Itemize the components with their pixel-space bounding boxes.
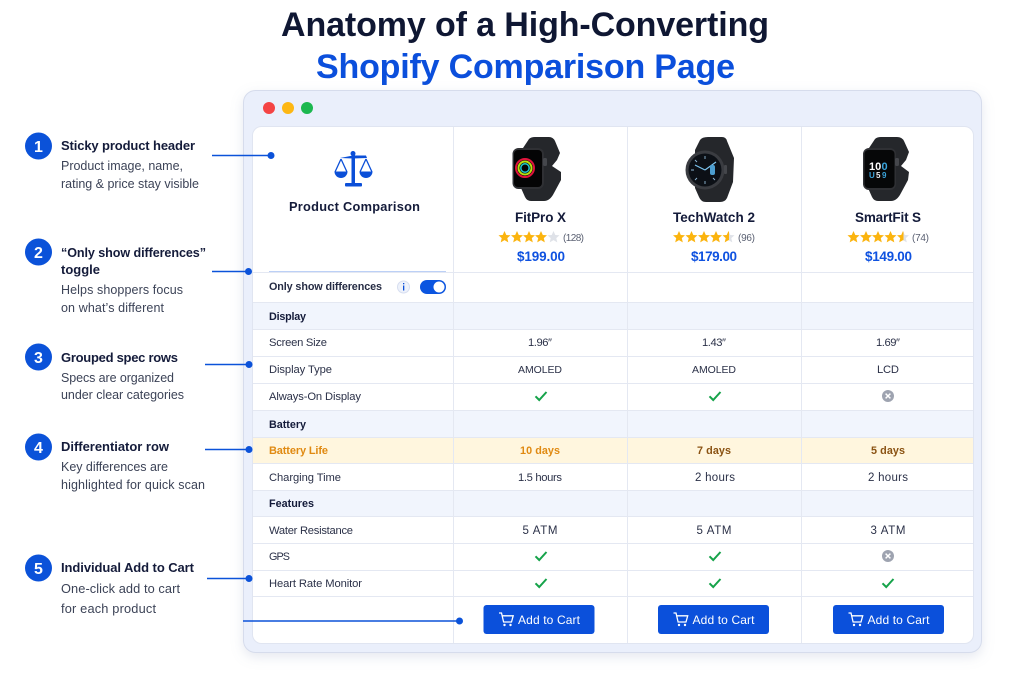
callout 1: sticky product header: Product image, name, (61, 159, 183, 173)
callout 2: only show differences toggle: toggle (61, 262, 100, 277)
callout 2: only show differences toggle: 2 (34, 245, 43, 262)
callout 2: only show differences toggle: “Only show differences” (61, 246, 206, 260)
callout 1: sticky product header: rating & price stay visible (61, 177, 199, 191)
icon: info (398, 281, 410, 293)
title (281, 6, 769, 86)
rating stars: (96) (738, 233, 755, 244)
icon: rectangular smartwatch (863, 137, 909, 201)
callout 5: individual add to cart (25, 554, 195, 616)
differentiator row: 5 days (871, 445, 905, 457)
product: TechWatch 2 (673, 137, 755, 264)
spec group: battery: Battery (269, 419, 306, 431)
toggle row (269, 280, 446, 294)
icon: rectangular smartwatch: 9 (882, 171, 887, 180)
differentiator row: Battery Life (269, 445, 328, 457)
title: Anatomy of a High-Converting (281, 6, 769, 44)
icon: rectangular smartwatch: 10 (869, 161, 881, 173)
spec group: battery: 2 hours (695, 472, 735, 484)
rating stars: (128) (563, 233, 584, 244)
arrow: callout 1 leader (212, 152, 274, 159)
callout 1: sticky product header: 1 (34, 139, 43, 156)
toggle switch (420, 280, 446, 294)
spec group: features: 5 ATM (696, 525, 732, 537)
callout 3: grouped spec rows: under clear categories (61, 388, 184, 402)
callout 2: only show differences toggle: Helps shoppers focus (61, 283, 183, 297)
spec group: display: Always-On Display (269, 391, 361, 403)
spec group: display (269, 311, 900, 403)
button: SmartFit S: Add to Cart (868, 613, 930, 627)
spec group: features (269, 498, 906, 590)
icon: rectangular smartwatch: 5 (876, 171, 881, 180)
product: TechWatch 2: TechWatch 2 (673, 210, 755, 225)
callout 3: grouped spec rows: 3 (34, 350, 43, 367)
spec group: display: Display Type (269, 364, 332, 376)
callout 2: only show differences toggle (25, 238, 206, 315)
spec group: features: GPS (269, 551, 290, 563)
icon: rectangular smartwatch: U (869, 171, 875, 180)
icon: scales (334, 151, 372, 186)
title: Shopify Comparison Page (316, 48, 735, 86)
product: SmartFit S: SmartFit S (855, 210, 921, 225)
callout 3: grouped spec rows: Grouped spec rows (61, 350, 178, 365)
spec group: battery: 1.5 hours (518, 472, 562, 484)
product: FitPro X: $199.00 (517, 249, 565, 264)
callout 1: sticky product header (25, 132, 199, 191)
column header: product comparison: Product Comparison (289, 199, 420, 214)
spec group: display: 1.96″ (528, 337, 552, 349)
callout 5: individual add to cart: 5 (34, 561, 43, 578)
table grid (253, 127, 973, 643)
column header: product comparison (289, 151, 420, 214)
spec group: display: Display (269, 311, 306, 323)
button: TechWatch 2: Add to Cart (692, 613, 755, 627)
spec group: display: Screen Size (269, 337, 327, 349)
spec group: display: 1.69″ (876, 337, 900, 349)
callout 4: differentiator row: Key differences are (61, 460, 168, 474)
spec group: display: AMOLED (518, 364, 562, 376)
spec group: battery: 2 hours (868, 472, 908, 484)
differentiator row: 10 days (520, 445, 560, 457)
callout 2: only show differences toggle: on what’s different (61, 301, 165, 315)
differentiator row: 7 days (697, 445, 731, 457)
button: SmartFit S (833, 605, 944, 634)
spec group: battery (269, 419, 908, 484)
spec group: features: Heart Rate Monitor (269, 578, 362, 590)
button: TechWatch 2 (658, 605, 769, 634)
callout 5: individual add to cart: One-click add to cart (61, 581, 180, 596)
callout 1: sticky product header: Sticky product header (61, 138, 195, 153)
toggle row: Only show differences (269, 281, 382, 293)
spec group: display: AMOLED (692, 364, 736, 376)
product: FitPro X: FitPro X (515, 210, 566, 225)
icon: rectangular smartwatch: 0 (882, 161, 888, 173)
window controls (263, 102, 313, 114)
product: SmartFit S (848, 137, 929, 264)
callout 3: grouped spec rows: Specs are organized (61, 371, 174, 385)
button: FitPro X (484, 605, 594, 634)
spec group: features: 5 ATM (522, 525, 558, 537)
product: FitPro X (498, 137, 584, 264)
panel: browser window (244, 90, 982, 652)
section and highlight row bands (253, 303, 973, 516)
callout 4: differentiator row: 4 (34, 440, 43, 457)
callout 5: individual add to cart: Individual Add to Cart (61, 560, 195, 575)
rating stars: (74) (912, 233, 929, 244)
callout 5: individual add to cart: for each product (61, 601, 156, 616)
arrow: callout 2 leader (212, 268, 446, 275)
product: SmartFit S: $149.00 (865, 249, 912, 264)
spec group: features: Features (269, 498, 314, 510)
product: TechWatch 2: $179.00 (691, 249, 737, 264)
add to cart buttons (484, 605, 944, 634)
icon: square smartwatch (512, 137, 561, 201)
spec group: display: LCD (877, 364, 899, 376)
callout 3: grouped spec rows (25, 344, 184, 402)
spec group: features: 3 ATM (870, 525, 906, 537)
callout 4: differentiator row: Differentiator row (61, 439, 170, 454)
spec group: battery: Charging Time (269, 472, 341, 484)
arrow: callout 4 leader (205, 446, 252, 453)
spec group: features: Water Resistance (269, 525, 353, 537)
callout 4: differentiator row: highlighted for quick scan (61, 478, 205, 492)
icon: round smartwatch (686, 137, 734, 202)
callout 4: differentiator row (25, 434, 205, 492)
differentiator row (269, 445, 905, 457)
arrow: callout 3 leader (205, 361, 252, 368)
button: FitPro X: Add to Cart (518, 613, 581, 627)
arrow: callout 5 leaders (207, 575, 463, 624)
spec group: display: 1.43″ (702, 337, 726, 349)
